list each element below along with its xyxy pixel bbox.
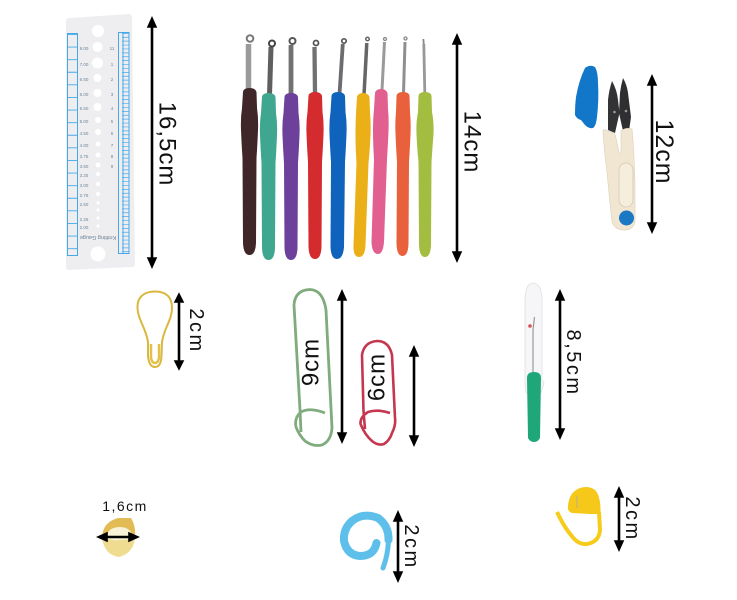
label: 2cm spiral: 2cm: [400, 524, 422, 570]
label: 8,5cm: 8,5cm: [562, 330, 584, 396]
knitting gauge ruler: 3.25: [80, 173, 89, 178]
red stitch holder pin: [360, 341, 395, 445]
knitting gauge ruler: 6: [111, 131, 114, 136]
arrow: gauge height: [148, 18, 156, 267]
knitting gauge ruler: 2.25: [80, 217, 89, 222]
knitting gauge ruler: 4.00: [80, 143, 89, 148]
knitting gauge ruler: 1: [111, 62, 114, 67]
knitting gauge ruler: 3.00: [80, 183, 89, 188]
label: 6cm: 6cm: [364, 353, 390, 401]
gold ring: [102, 518, 135, 557]
knitting gauge ruler: 5.00: [80, 119, 89, 124]
label: 9cm: 9cm: [298, 338, 324, 386]
arrow: hooks height: [453, 35, 461, 261]
knitting gauge ruler: 2.75: [80, 193, 89, 198]
green stitch holder pin: [294, 290, 332, 446]
arrow: marker height: [615, 488, 623, 550]
knitting gauge ruler: 8: [111, 154, 114, 159]
knitting gauge ruler: 7: [111, 143, 114, 148]
hook: pink: [372, 38, 389, 254]
label: 2cm marker: 2cm: [621, 496, 643, 542]
arrow: scissors height: [648, 76, 656, 232]
knitting gauge ruler: 5.50: [80, 106, 89, 111]
knitting gauge ruler: 11: [110, 46, 115, 51]
hook: blue: [329, 39, 347, 259]
knitting gauge ruler: 3.50: [80, 164, 89, 169]
yellow locking marker: [557, 487, 601, 544]
knitting gauge ruler: 3.75: [80, 154, 89, 159]
knitting gauge ruler: 2.00: [80, 225, 89, 230]
arrow: ring width: [98, 533, 138, 541]
hook: orange: [395, 37, 411, 256]
scissors blue cap: [575, 66, 598, 128]
arrow: red pin height: [410, 347, 418, 445]
knitting gauge ruler: Knitting Gauge: [80, 234, 116, 240]
arrow: seam ripper height: [556, 291, 564, 438]
blue spiral marker: [344, 516, 389, 568]
knitting gauge ruler: 3: [111, 92, 114, 97]
knitting gauge ruler: 6.50: [80, 77, 89, 82]
knitting gauge ruler: 8.00: [80, 46, 89, 51]
label: 16,5cm: 16,5cm: [154, 102, 180, 186]
knitting gauge ruler: 2: [111, 77, 114, 82]
knitting gauge ruler: 4.50: [80, 131, 89, 136]
hook: brown: [241, 35, 258, 255]
hook: purple: [282, 38, 300, 260]
knitting gauge ruler: 7.00: [80, 62, 89, 67]
knitting gauge ruler: [66, 14, 135, 270]
label: 14cm: 14cm: [458, 111, 486, 173]
knitting gauge ruler: 5: [111, 119, 114, 124]
gold bulb pin: [137, 292, 172, 367]
arrow: spiral height: [394, 512, 402, 581]
seam ripper: [525, 283, 544, 442]
label: 1,6cm: 1,6cm: [102, 498, 148, 514]
knitting gauge ruler: 6.00: [80, 92, 89, 97]
hook: teal: [260, 40, 277, 260]
knitting gauge ruler: 9: [111, 164, 114, 169]
label: 2cm bulb pin: 2cm: [185, 308, 207, 354]
hook: red: [306, 40, 324, 259]
label: 12cm: 12cm: [650, 119, 678, 185]
hook: green: [416, 39, 434, 257]
hook: yellow: [353, 37, 371, 257]
arrow: bulb pin height: [175, 294, 183, 369]
knitting gauge ruler: 2.50: [80, 202, 89, 207]
knitting gauge ruler: 4: [111, 106, 114, 111]
thread snips: [603, 78, 635, 230]
crochet hooks set: [241, 35, 434, 260]
arrow: green pin height: [338, 291, 346, 442]
